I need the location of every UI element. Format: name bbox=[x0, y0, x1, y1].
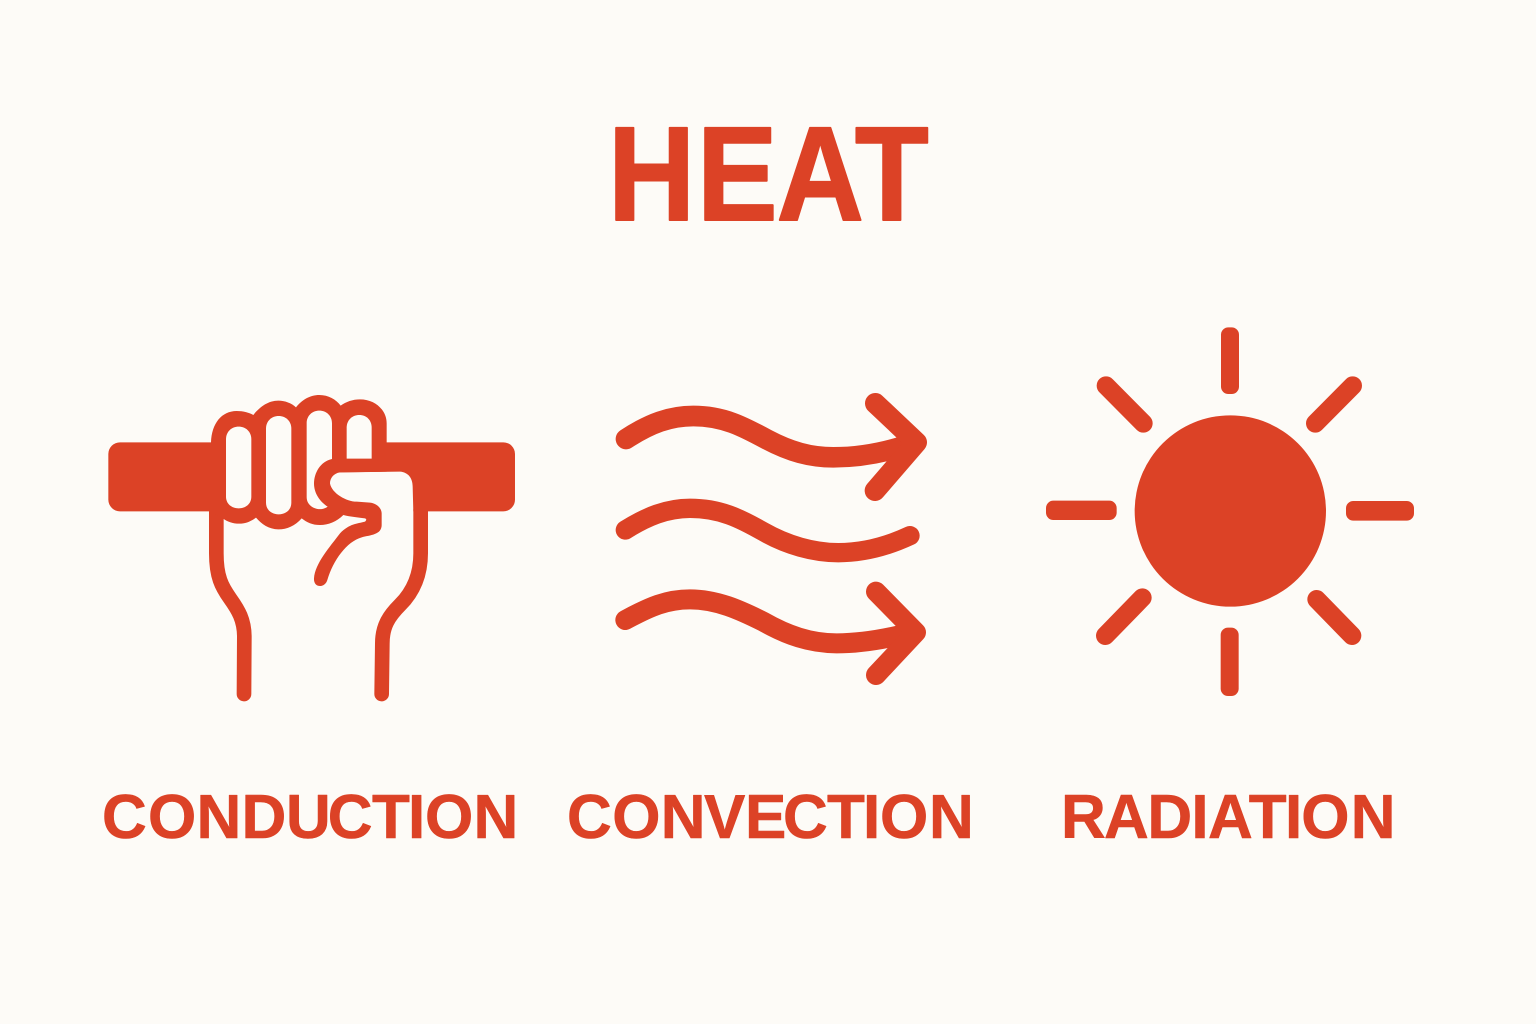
palm interior bbox=[223, 472, 414, 537]
label: conduction: CONDUCTION bbox=[102, 783, 518, 852]
middle wavy line bbox=[625, 508, 910, 553]
fist and thumb silhouette bbox=[209, 395, 387, 586]
finger gap 4 bbox=[347, 415, 372, 459]
finger gap 2 bbox=[266, 416, 291, 514]
finger gap 1 bbox=[226, 427, 251, 508]
bottom wavy arrow bbox=[625, 592, 916, 675]
icon: sun (radiation) bbox=[1046, 327, 1414, 696]
hot bar bbox=[108, 442, 515, 511]
label: radiation: RADIATION bbox=[1061, 783, 1395, 852]
label: convection: CONVECTION bbox=[567, 783, 974, 852]
sun rays bbox=[1046, 327, 1414, 696]
wrist outlines bbox=[216, 510, 421, 694]
icon: hand gripping a hot bar (conduction) bbox=[108, 395, 515, 694]
icon: three wavy arrows (convection) bbox=[625, 403, 917, 675]
title: HEAT: HEAT bbox=[608, 100, 929, 249]
top wavy arrow bbox=[626, 403, 917, 491]
sun disc bbox=[1135, 415, 1326, 607]
finger gap 3 bbox=[307, 411, 332, 509]
